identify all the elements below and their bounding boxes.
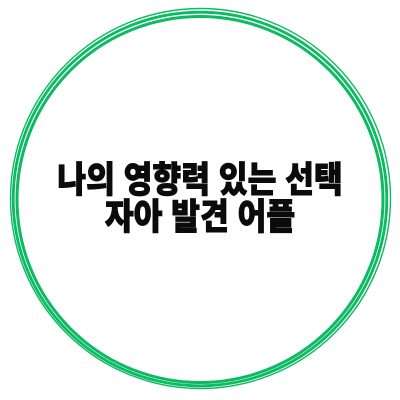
title — [57, 159, 343, 236]
title: 나의 영향력 있는 선택 — [57, 159, 343, 200]
title: 자아 발견 어플 — [105, 196, 295, 236]
